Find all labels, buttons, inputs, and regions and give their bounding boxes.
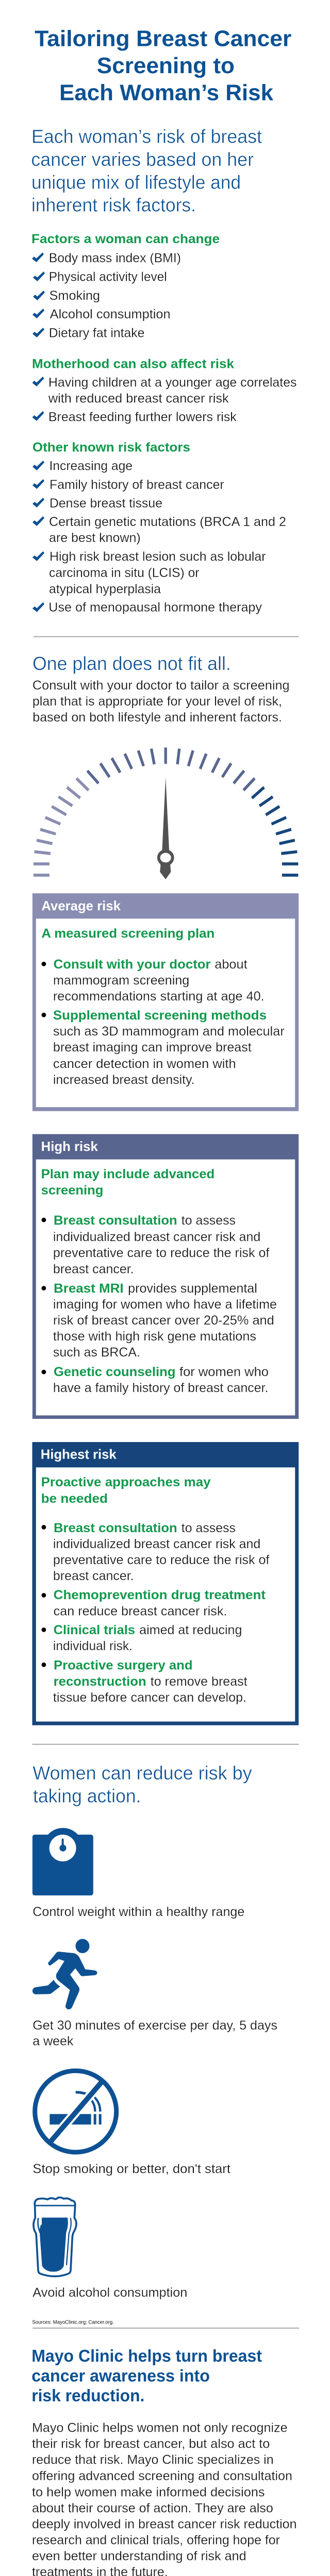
mayo clinic paragraph: to help women make informed decisions <box>32 2485 265 2500</box>
mayo clinic paragraph: deeply involved in breast cancer risk reduction <box>32 2517 297 2532</box>
panel: average risk: breast imaging can improve breast <box>53 1040 252 1055</box>
panel: highest risk: tissue before cancer can develop. <box>53 1690 246 1705</box>
icon: beer glass <box>34 2197 76 2276</box>
panel: high risk: High risk <box>41 1139 98 1154</box>
gauge <box>34 748 298 879</box>
panel: highest risk: individualized breast cancer risk and <box>53 1537 260 1551</box>
one plan heading and text: plan that is appropriate for your level of risk, <box>32 694 282 709</box>
sources: Sources: MayoClinic.org; Cancer.org. <box>32 2320 114 2326</box>
panel: average risk: recommendations starting at age 40. <box>53 989 265 1004</box>
heading: mayo clinic helps: cancer awareness into <box>31 2366 210 2385</box>
panel: high risk: such as BRCA. <box>53 1345 140 1360</box>
panel: high risk: Plan may include advanced <box>41 1167 214 1181</box>
heading: mayo clinic helps <box>31 2346 262 2405</box>
heading: women can reduce risk: taking action. <box>33 1786 141 1807</box>
motherhood can also affect risk: Breast feeding further lowers risk <box>48 410 237 424</box>
mayo clinic paragraph: about their course of action. They are also <box>32 2501 273 2515</box>
panel: highest risk: can reduce breast cancer risk. <box>54 1604 227 1618</box>
one plan heading and text: One plan does not fit all. <box>32 653 231 674</box>
mayo clinic paragraph: Mayo Clinic helps women not only recognize <box>32 2420 288 2435</box>
panel: high risk: those with high risk gene mutations <box>53 1329 256 1344</box>
factors a woman can change: Dietary fat intake <box>49 326 144 340</box>
mayo clinic paragraph: even better understanding of risk and <box>32 2549 246 2564</box>
panel: highest risk: Proactive surgery and <box>54 1658 193 1673</box>
panel: average risk: cancer detection in women with <box>53 1057 236 1071</box>
text: exercise: Get 30 minutes of exercise per day, 5 days <box>32 2018 277 2032</box>
factors a woman can change: Physical activity level <box>49 270 167 284</box>
text: stop smoking: Stop smoking or better, don't start <box>32 2162 230 2176</box>
panel: average risk <box>32 893 299 1111</box>
panel: highest risk: Breast consultation <box>54 1521 177 1535</box>
one plan heading and text: Consult with your doctor to tailor a screening <box>32 678 290 692</box>
title: Tailoring Breast Cancer <box>35 26 291 51</box>
panel: highest risk: breast cancer. <box>53 1569 134 1583</box>
text: exercise <box>32 2018 277 2048</box>
mayo clinic paragraph: offering advanced screening and consultation <box>32 2469 292 2483</box>
panel: highest risk: Highest risk <box>41 1446 117 1462</box>
panel: average risk: Average risk <box>41 898 121 913</box>
other known risk factors: Use of menopausal hormone therapy <box>48 600 262 615</box>
factors a woman can change: Factors a woman can change <box>31 232 220 246</box>
other known risk factors: atypical hyperplasia <box>49 582 161 596</box>
other known risk factors: Dense breast tissue <box>50 496 162 511</box>
other known risk factors: High risk breast lesion such as lobular <box>50 549 266 564</box>
panel: high risk: have a family history of breast cancer. <box>53 1381 268 1395</box>
panel: highest risk: Proactive approaches may <box>41 1475 211 1489</box>
panel: highest risk: to assess <box>182 1521 236 1535</box>
panel: high risk: Genetic counseling <box>54 1365 175 1379</box>
panel: high risk: imaging for women who have a lifetime <box>53 1297 277 1312</box>
one plan heading and text <box>32 653 290 725</box>
motherhood can also affect risk: with reduced breast cancer risk <box>48 392 229 406</box>
other known risk factors: carcinoma in situ (LCIS) or <box>49 566 199 580</box>
other known risk factors: Other known risk factors <box>32 440 190 454</box>
motherhood can also affect risk <box>32 357 297 424</box>
panel: average risk: about <box>214 957 248 972</box>
heading: mayo clinic helps: Mayo Clinic helps turn breast <box>31 2346 262 2365</box>
factors a woman can change: Alcohol consumption <box>50 307 171 321</box>
panel: highest risk: individual risk. <box>53 1639 133 1653</box>
panel: high risk: risk of breast cancer over 20-25% and <box>53 1313 274 1328</box>
factors a woman can change: Smoking <box>50 289 100 303</box>
icon: scale <box>32 1828 93 1895</box>
heading: mayo clinic helps: risk reduction. <box>31 2386 144 2405</box>
panel: average risk: such as 3D mammogram and molecular <box>53 1024 285 1039</box>
heading: women can reduce risk: Women can reduce risk by <box>32 1762 252 1784</box>
other known risk factors: are best known) <box>49 531 141 545</box>
title: Each Woman’s Risk <box>59 80 274 106</box>
intro text: unique mix of lifestyle and <box>31 172 241 193</box>
intro text: inherent risk factors. <box>31 195 196 216</box>
motherhood can also affect risk: Motherhood can also affect risk <box>32 357 234 371</box>
panel: average risk: A measured screening plan <box>41 926 214 941</box>
panel: highest risk: preventative care to reduce the risk of <box>53 1553 269 1567</box>
intro text <box>31 126 262 216</box>
text: control weight: Control weight within a healthy range <box>32 1905 244 1919</box>
other known risk factors: Family history of breast cancer <box>50 478 224 492</box>
panel: highest risk: reconstruction <box>54 1674 146 1689</box>
panel: high risk: screening <box>41 1183 103 1197</box>
panel: high risk: preventative care to reduce the risk of <box>53 1246 269 1260</box>
panel: average risk: mammogram screening <box>53 973 189 988</box>
panel: highest risk: be needed <box>41 1492 108 1506</box>
panel: highest risk: Chemoprevention drug treatment <box>54 1588 266 1602</box>
title: Screening to <box>97 53 235 78</box>
panel: high risk: provides supplemental <box>128 1281 257 1296</box>
panel: highest risk <box>32 1442 299 1725</box>
panel: high risk: to assess <box>182 1213 236 1228</box>
mayo clinic paragraph: their risk for breast cancer, but also act to <box>32 2436 270 2451</box>
other known risk factors: Increasing age <box>50 459 133 473</box>
panel: average risk: increased breast density. <box>53 1073 195 1087</box>
heading: women can reduce risk <box>32 1762 252 1807</box>
panel: highest risk: aimed at reducing <box>139 1623 242 1637</box>
panel: highest risk: Clinical trials <box>54 1623 135 1637</box>
mayo clinic paragraph <box>32 2420 297 2576</box>
mayo clinic paragraph: reduce that risk. Mayo Clinic specializes in <box>32 2453 274 2467</box>
panel: high risk: for women who <box>179 1365 269 1379</box>
other known risk factors <box>32 440 286 615</box>
factors a woman can change: Body mass index (BMI) <box>49 251 181 265</box>
other known risk factors: Certain genetic mutations (BRCA 1 and 2 <box>49 515 286 529</box>
title <box>35 26 291 106</box>
intro text: cancer varies based on her <box>31 149 254 170</box>
text: exercise: a week <box>32 2034 74 2048</box>
intro text: Each woman’s risk of breast <box>31 126 262 147</box>
icon: no smoking <box>35 2071 117 2152</box>
panel: highest risk: to remove breast <box>151 1674 248 1689</box>
factors a woman can change <box>31 232 220 340</box>
one plan heading and text: based on both lifestyle and inherent factors. <box>32 710 282 725</box>
panel: high risk <box>32 1134 299 1419</box>
panel: high risk: individualized breast cancer risk and <box>53 1230 260 1244</box>
panel: high risk: Breast MRI <box>54 1281 124 1296</box>
panel: high risk: breast cancer. <box>53 1262 134 1276</box>
mayo clinic paragraph: research and clinical trials, offering hope for <box>32 2533 280 2547</box>
panel: average risk: Consult with your doctor <box>54 957 211 972</box>
panel: high risk: Breast consultation <box>54 1213 177 1228</box>
text: avoid alcohol: Avoid alcohol consumption <box>32 2285 187 2300</box>
motherhood can also affect risk: Having children at a younger age correlates <box>48 375 297 389</box>
panel: average risk: Supplemental screening methods <box>53 1008 267 1023</box>
icon: runner <box>32 1939 97 2009</box>
